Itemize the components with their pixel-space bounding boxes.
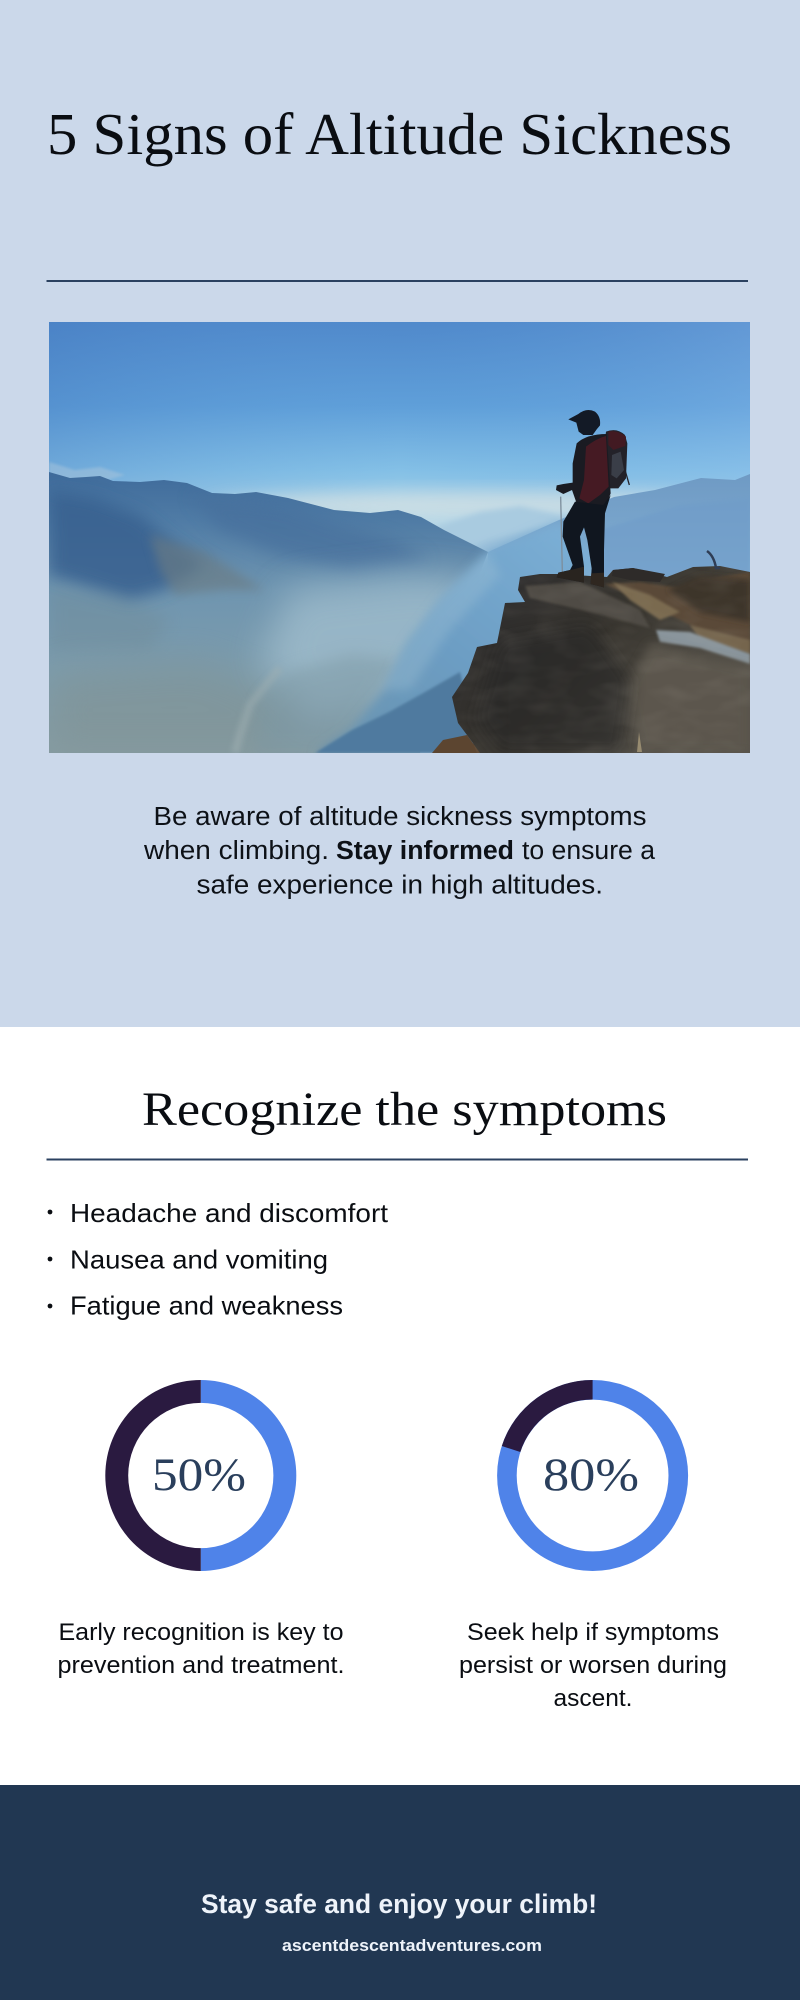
rock cliff [432,551,750,753]
donut chart: 50%: 50% [152,1449,246,1501]
title divider [46,280,748,282]
caption: early recognition [58,1619,344,1679]
caption: early recognition: Early recognition is key to [58,1619,344,1646]
intro paragraph: to ensure a [522,837,656,865]
panel: footer [0,1785,800,2000]
donut chart: 50% [105,1380,296,1571]
donut chart: 80% [502,1380,678,1561]
caption: seek help: persist or worsen during [459,1652,727,1679]
photo: climber on rocky ledge above misty mountain valley [49,322,770,753]
section divider [46,1158,748,1160]
footer website: ascentdescentadventures.com [282,1936,542,1955]
caption: seek help: Seek help if symptoms [467,1619,719,1646]
title: 5 Signs of Altitude Sickness [47,101,732,167]
caption: seek help [459,1619,727,1712]
symptom list [48,1198,389,1320]
donut chart: 80%: 80% [543,1449,639,1501]
symptom list: Nausea and vomiting [70,1244,328,1274]
intro paragraph: Stay informed [336,837,514,865]
intro paragraph: safe experience in high altitudes. [196,872,603,900]
intro paragraph [143,803,656,900]
symptom list: Headache and discomfort [70,1198,389,1228]
panel: hero section [0,0,800,1027]
intro paragraph: Be aware of altitude sickness symptoms [154,803,646,831]
caption: seek help: ascent. [554,1685,632,1712]
symptom list: Fatigue and weakness [70,1290,343,1320]
footer message: Stay safe and enjoy your climb! [201,1889,597,1919]
caption: early recognition: prevention and treatment. [58,1652,344,1679]
climber silhouette [556,410,629,587]
section heading: Recognize the symptoms [142,1083,667,1136]
panel: symptoms section [0,1027,800,1785]
intro paragraph: when climbing. [143,837,329,865]
